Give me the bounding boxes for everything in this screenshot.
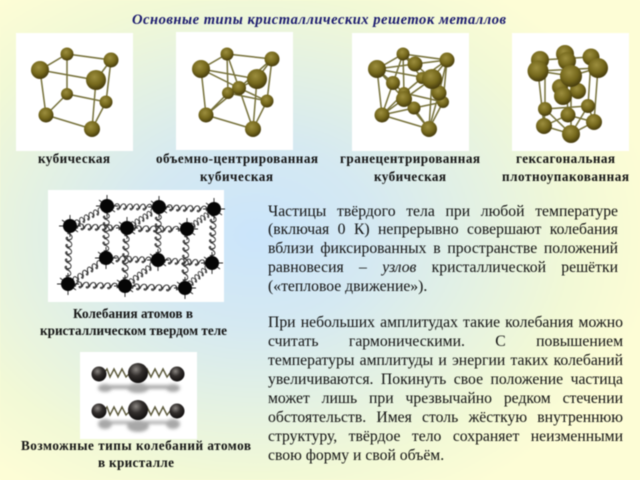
text block: thermal motion paragraph: равновесия – узлов кристаллической решётки	[268, 259, 618, 276]
text block: thermal motion paragraph	[268, 203, 618, 295]
caption: hexagonal close-packed	[502, 151, 629, 184]
text block: harmonic vibrations paragraph: При небольших амплитудах такие колебания можно	[268, 314, 623, 331]
caption: hexagonal close-packed: плотноупакованная	[502, 169, 629, 184]
text block: harmonic vibrations paragraph: свою форму и свой объём.	[268, 447, 444, 464]
text block: thermal motion paragraph: («тепловое движение»).	[268, 278, 427, 295]
text block: thermal motion paragraph: (включая 0 К) непрерывно совершают колебания	[268, 221, 618, 238]
title: Основные типы кристаллических решеток металлов	[132, 12, 506, 28]
text block: harmonic vibrations paragraph: температуры амплитуды и энергии таких колебаний	[268, 352, 623, 369]
caption: body-centered cubic: объемно-центрированная	[156, 151, 318, 166]
panel: hexagonal close-packed lattice	[512, 33, 629, 151]
caption: possible vibration types: Возможные типы колебаний атомов	[21, 438, 251, 453]
text block: thermal motion paragraph: Частицы твёрдого тела при любой температуре	[268, 203, 618, 220]
caption: body-centered cubic: кубическая	[200, 169, 273, 184]
caption: atom vibrations in a crystalline solid	[40, 306, 227, 338]
caption: atom vibrations in a crystalline solid: кристаллическом твердом теле	[40, 323, 227, 338]
panel: simple cubic lattice	[16, 33, 133, 151]
text block: thermal motion paragraph: вблизи фиксированных в пространстве положений	[268, 240, 618, 257]
text block: harmonic vibrations paragraph: считать гармоническими. С повышением	[268, 333, 623, 350]
caption: face-centered cubic: гранецентрированная	[340, 151, 480, 166]
text block: harmonic vibrations paragraph: может лишь при чрезвычайно редком стечении	[268, 390, 623, 407]
text block: harmonic vibrations paragraph	[267, 314, 624, 464]
panel: possible vibration types	[80, 352, 197, 439]
panel: atoms on springs in a crystal	[48, 190, 225, 302]
panel: body-centered cubic lattice	[176, 32, 293, 150]
caption: simple cubic: кубическая	[38, 151, 110, 166]
caption: face-centered cubic	[340, 151, 480, 184]
caption: atom vibrations in a crystalline solid: Колебания атомов в	[73, 306, 193, 321]
panel: face-centered cubic lattice	[352, 33, 469, 151]
text block: harmonic vibrations paragraph: структуру, твёрдое тело сохраняет неизменными	[268, 428, 623, 445]
caption: body-centered cubic	[156, 151, 318, 184]
caption: possible vibration types	[21, 438, 251, 470]
text block: harmonic vibrations paragraph: увеличиваются. Покинуть свое положение частица	[268, 371, 623, 388]
text block: harmonic vibrations paragraph: обстоятельств. Имея столь жёсткую внутреннюю	[268, 409, 623, 426]
caption: hexagonal close-packed: гексагональная	[516, 151, 615, 166]
caption: face-centered cubic: кубическая	[374, 169, 446, 184]
caption: possible vibration types: в кристалле	[98, 455, 174, 470]
